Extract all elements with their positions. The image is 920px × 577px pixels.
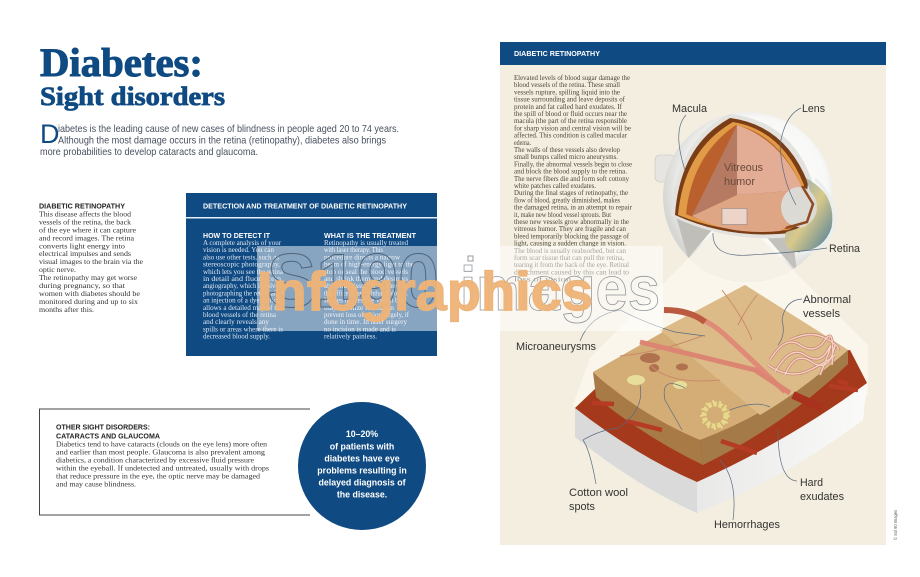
label: macula: Macula [672, 103, 708, 115]
watermark: S190 [267, 239, 439, 324]
intro text: Although the most damage occurs in the retina (retinopathy), diabetes also brings [58, 136, 386, 146]
column: how to detect it: which lets you see the retina [203, 268, 284, 276]
column: how to detect it: blood vessels of the retina [203, 311, 277, 319]
sclera cut edge [671, 114, 812, 238]
panel: diabetic retinopathy illustration [500, 42, 886, 545]
column: how to detect it: in detail and fluorescein [203, 275, 281, 283]
label: retina: Retina [829, 243, 861, 255]
text block: diabetic retinopathy: DIABETIC RETINOPATHY [39, 204, 125, 210]
column: what is the treatment: may stabilize it and can [324, 304, 394, 312]
column: what is the treatment: procedure directs a narrow [324, 253, 401, 261]
column: what is the treatment: prevent loss of vision largely, if [324, 311, 410, 319]
column: how to detect it [203, 233, 284, 341]
text block: diabetic retinopathy: The retinopathy may get worse [39, 273, 138, 282]
callout: 10-20% statistic: of patients with [330, 442, 394, 452]
column: how to detect it: decreased blood supply. [203, 333, 270, 341]
column: what is the treatment: stop or seal the blood vessels [324, 268, 408, 276]
label: cotton wool spots: Cotton wool [569, 487, 628, 499]
text block: diabetic retinopathy: electrical impulses and sends [39, 249, 131, 258]
block top [593, 285, 848, 440]
text block: retinopathy explanation: The walls of these vessels also develop [514, 146, 620, 154]
label: hard exudates: exudates [800, 491, 844, 503]
text block: diabetic retinopathy: during pregnancy, so that [39, 281, 126, 290]
panel: other sight disorders: Diabetics tend to have cataracts (clouds on the eye lens) more often [56, 440, 267, 448]
red vessel stubs [592, 381, 858, 453]
column: how to detect it: stereoscopic photography, [203, 261, 280, 269]
text block: retinopathy explanation: The blood is usually reabsorbed, but can [514, 247, 626, 255]
text block: retinopathy explanation: and block the blood supply to the retina. [514, 168, 627, 176]
panel: other sight disorders: diabetics, a condition characterized by excessive fluid pressure [56, 456, 255, 464]
panel: other sight disorders [40, 409, 310, 515]
text block: retinopathy explanation: white patches called exudates. [514, 182, 596, 190]
retina layers [675, 118, 808, 235]
column: how to detect it: spills or areas where there is [203, 325, 283, 333]
text block: diabetic retinopathy: This disease affects the blood [39, 210, 131, 218]
text block: retinopathy explanation: detachment caused by this can lead to [514, 268, 630, 276]
abnormal vessels tangle [768, 334, 838, 375]
text block: retinopathy explanation: affected. This condition is called macular [514, 132, 628, 140]
column: how to detect it: an injection of a dye, which [203, 297, 280, 305]
label: vitreous humor: humor [724, 176, 755, 188]
column: what is the treatment [324, 233, 417, 341]
column: how to detect it: photographing the retina after [203, 289, 284, 297]
text block: diabetic retinopathy: visual images to the brain via the [39, 257, 144, 266]
panel header: DIABETIC RETINOPATHY [514, 51, 600, 58]
main vessels [640, 310, 822, 408]
title: Diabetes: [40, 40, 203, 85]
column: what is the treatment: relatively painless. [324, 333, 377, 341]
label: lens: Lens [802, 103, 825, 115]
label: vitreous humor: Vitreous [724, 162, 763, 174]
panel: detection and treatment [186, 193, 437, 356]
label: hard exudates: Hard [800, 477, 823, 489]
label: abnormal vessels [803, 294, 851, 320]
column: how to detect it: allows a detailed map of the [203, 304, 283, 312]
callout: 10-20% statistic [298, 402, 426, 530]
text block: diabetic retinopathy: optic nerve. [39, 265, 76, 274]
detail square [722, 208, 747, 224]
text block: retinopathy explanation: macula (the part of the retina responsible [514, 117, 627, 125]
text block: retinopathy explanation: tissue surrounding and leave deposits of [514, 96, 626, 104]
text block: retinopathy explanation: During the final stages of retinopathy, the [514, 189, 628, 197]
panel header [500, 42, 886, 65]
title: Sight disorders [40, 82, 225, 111]
text block: retinopathy explanation: edema. [514, 139, 531, 147]
callout: 10-20% statistic: the disease. [337, 490, 387, 500]
column: how to detect it: A complete analysis of your [203, 239, 282, 247]
text block: retinopathy explanation: it, make new blood vessel sprouts. But [514, 211, 611, 219]
optic nerve [655, 155, 675, 182]
column: what is the treatment: WHAT IS THE TREATMENT [324, 233, 417, 240]
column: what is the treatment: abnormal tissue. It is done in [324, 282, 404, 290]
title [40, 40, 225, 111]
panel: other sight disorders: OTHER SIGHT DISORDERS: [56, 424, 150, 432]
lighter plane on top face [660, 285, 848, 415]
leader lines [580, 108, 827, 520]
label: cotton wool spots: spots [569, 501, 595, 513]
copyright credit: © Sol 90 Images [892, 509, 898, 540]
eyeball [663, 112, 833, 282]
text block: diabetic retinopathy: converts light energy into [39, 241, 125, 250]
block sides [593, 372, 703, 465]
cornea and iris [785, 178, 834, 252]
red choroid layer [575, 350, 867, 482]
thin vessels [620, 290, 757, 381]
text block: retinopathy explanation: vitreous humor. They are fragile and can [514, 225, 626, 233]
text block: retinopathy explanation: blood vessels of the retina. These small [514, 81, 620, 89]
intro text: D [40, 119, 60, 149]
text block: diabetic retinopathy [39, 204, 144, 314]
watermark: Infographics [257, 260, 593, 322]
hemorrhages [640, 353, 688, 372]
text block: diabetic retinopathy: vessels of the retina, the back [39, 218, 131, 226]
hard exudates [701, 401, 729, 429]
text block: retinopathy explanation: flow of blood, greatly diminished, makes [514, 196, 620, 204]
label: abnormal vessels: Abnormal [803, 294, 851, 306]
text block: diabetic retinopathy: women with diabetes should be [39, 289, 141, 298]
callout: 10-20% statistic: delayed diagnosis of [318, 478, 406, 488]
column: how to detect it: vision is needed. You can [203, 246, 274, 254]
intro text [40, 119, 399, 158]
white base layer [575, 383, 867, 513]
column: what is the treatment: done in time. In laser surgery [324, 318, 407, 326]
lens [781, 187, 817, 227]
column: how to detect it: and clearly reveals any [203, 318, 269, 326]
text block: retinopathy explanation: bleed temporarily blocking the passage of [514, 232, 630, 240]
sphere shading below the cut [676, 218, 796, 282]
watermark: images [460, 255, 660, 324]
panel: other sight disorders: within the eyeball. If undetected and untreated, usually with drops [56, 464, 269, 472]
column: what is the treatment: the office of an ophthalmologist. [324, 289, 408, 297]
text block: diabetic retinopathy: of the eye where it can capture [39, 225, 137, 234]
column: how to detect it: HOW TO DETECT IT [203, 233, 271, 240]
text block: retinopathy explanation: Finally, the abnormal vessels begin to close [514, 160, 632, 168]
text block: retinopathy explanation: vessels rupture, spilling liquid into the [514, 88, 620, 96]
column: what is the treatment: It does not restore vision but [324, 297, 404, 305]
intro text: more probabilities to develop cataracts and glaucoma. [40, 147, 258, 158]
column: what is the treatment: no incision is made and is [324, 325, 396, 333]
column: what is the treatment: Retinopathy is usually treated [324, 239, 408, 247]
text block: retinopathy explanation: The nerve fibers die and form soft cottony [514, 175, 629, 183]
text block: retinopathy explanation: form scar tissue that can pull the retina, [514, 254, 624, 262]
panel: other sight disorders: CATARACTS AND GLAUCOMA [56, 434, 160, 440]
text block: diabetic retinopathy: and record images. The retina [39, 233, 135, 242]
callout: 10-20% statistic: diabetes have eye [324, 454, 400, 464]
label: hemorrhages: Hemorrhages [714, 519, 780, 531]
cotton wool spots [627, 375, 687, 389]
illustration: retina tissue block [575, 285, 867, 513]
panel: other sight disorders: and earlier than most people. Glaucoma is also prevalent among [56, 448, 265, 456]
callout: 10-20% statistic: 10–20% [346, 429, 378, 439]
panel: other sight disorders: that reduce pressure in the eye, the optic nerve may be damaged [56, 472, 260, 480]
text block: retinopathy explanation: the spill of blood or fluid occurs near the [514, 110, 627, 118]
text block: retinopathy explanation: these new vessels grow abnormally in the [514, 218, 629, 226]
watermark [257, 239, 663, 331]
text block: diabetic retinopathy: months after this. [39, 305, 94, 314]
text block: retinopathy explanation: light, causing a sudden change in vision. [514, 240, 626, 248]
text block: diabetic retinopathy: monitored during and up to six [39, 297, 138, 306]
column: what is the treatment: beam of high-energy light to the [324, 261, 414, 269]
intro text: iabetes is the leading cause of new cases of blindness in people aged 20 to 74 years. [58, 124, 399, 135]
illustration: eye cross-section [655, 112, 834, 290]
text block: retinopathy explanation: the damaged retina, in an attempt to repair [514, 204, 633, 212]
text block: retinopathy explanation: tearing it from the back of the eye. Retinal [514, 261, 629, 269]
interior walls [692, 125, 737, 216]
text block: retinopathy explanation: protein and fat called hard exudates. If [514, 103, 623, 111]
column: what is the treatment: with laser therapy. This [324, 246, 383, 254]
text block: retinopathy explanation: loss of vision. [514, 276, 574, 284]
panel heading: DETECTION AND TREATMENT OF DIABETIC RETINOPATHY [203, 204, 407, 210]
column: what is the treatment: and shrink them and destroys [324, 275, 408, 283]
magnification cone [573, 224, 868, 505]
column: how to detect it: angiography, which involves [203, 282, 281, 290]
label: abnormal vessels: vessels [803, 308, 840, 320]
text block: retinopathy explanation: Elevated levels of blood sugar damage the [514, 74, 630, 82]
text block: retinopathy explanation: small bumps called micro aneurysms. [514, 153, 618, 161]
panel: other sight disorders: and may cause blindness. [56, 480, 136, 488]
label: cotton wool spots [569, 487, 628, 513]
column: how to detect it: also use other tests, such as [203, 253, 279, 261]
text block: retinopathy explanation: for sharp vision and central vision will be [514, 124, 631, 132]
callout: 10-20% statistic: problems resulting in [317, 466, 407, 476]
text block: retinopathy explanation [514, 74, 633, 284]
abnormal vessels highlights [768, 334, 838, 375]
label: vitreous humor [724, 162, 763, 188]
label: hard exudates [800, 477, 844, 503]
label: microaneurysms: Microaneurysms [516, 341, 596, 353]
